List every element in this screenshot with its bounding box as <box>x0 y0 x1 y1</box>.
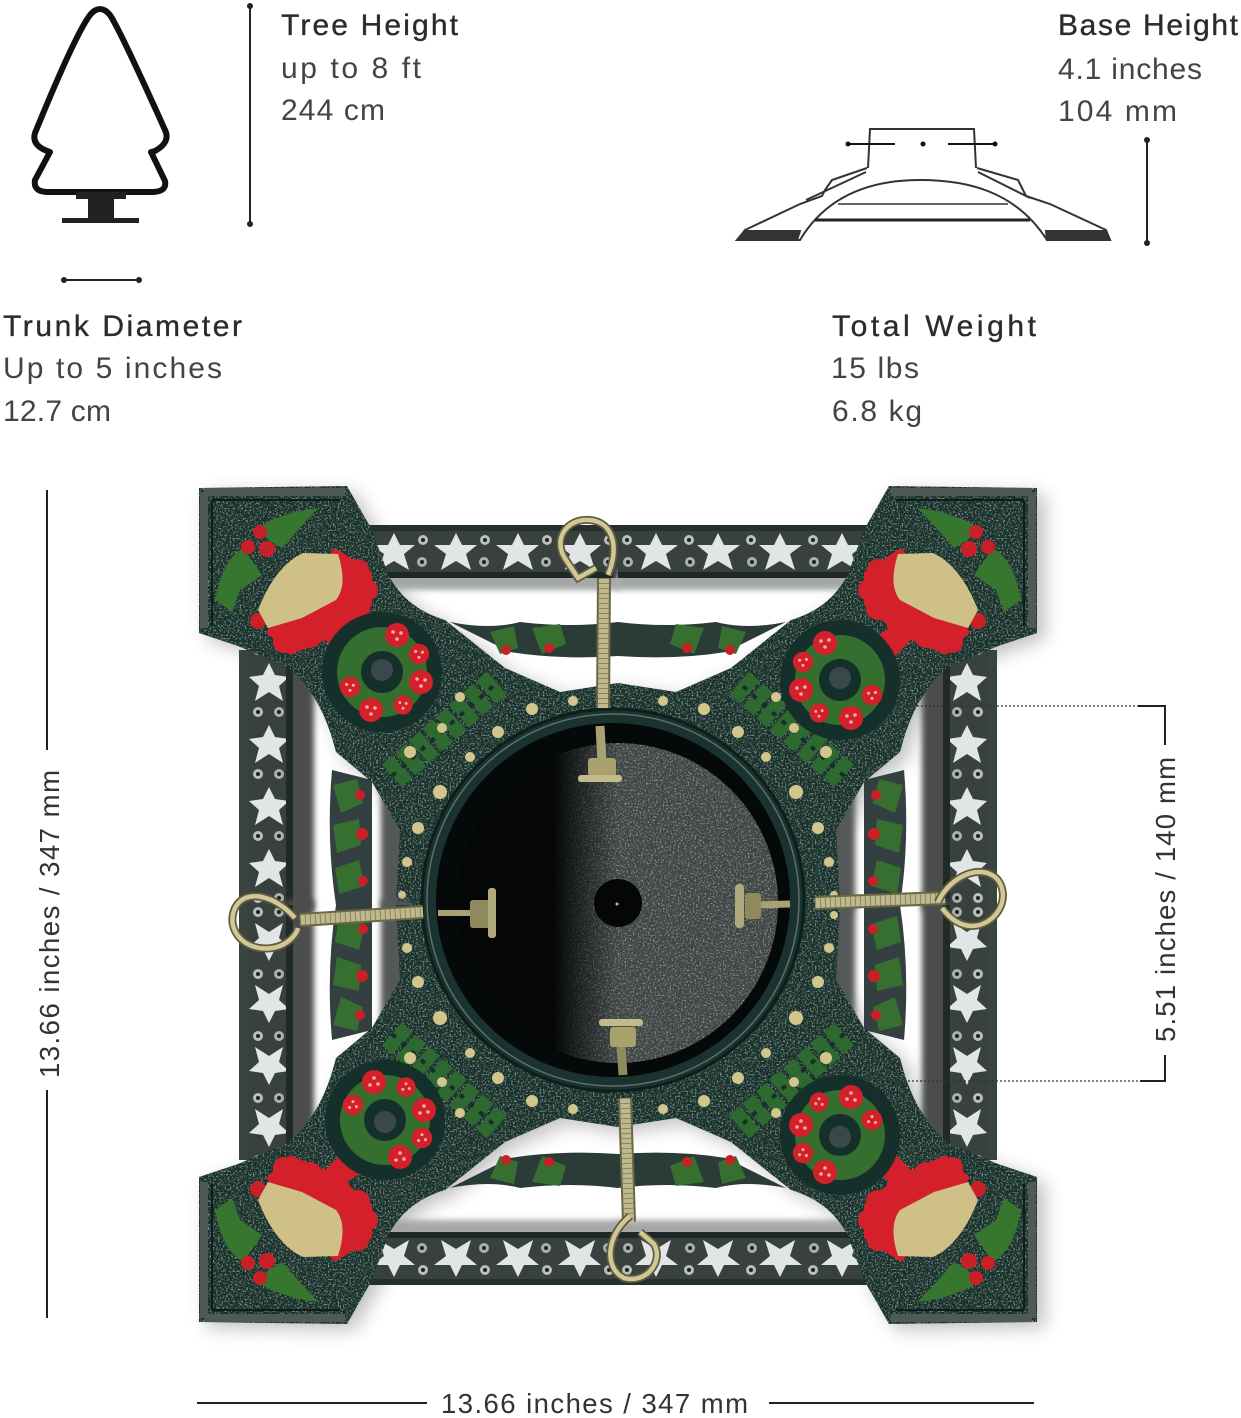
tree height text: up to 8 ft <box>281 52 422 85</box>
wreath: top right <box>780 620 900 740</box>
height dimension left: 13.66 inches / 347 mm <box>34 770 65 1078</box>
stand corner: bottom right <box>616 900 1037 1324</box>
trunk diameter measure line <box>61 277 142 283</box>
cast iron tree stand <box>199 486 1037 1324</box>
total weight text <box>831 310 1037 428</box>
tree height text: 244 cm <box>281 94 385 127</box>
base height measure line <box>1144 137 1150 246</box>
tree height text: Tree Height <box>281 9 459 42</box>
stand corner: bottom left <box>199 900 620 1324</box>
tree height measure line <box>247 3 253 227</box>
eye bolt: bottom <box>599 1019 657 1279</box>
base height text: 104 mm <box>1058 95 1177 128</box>
tree icon <box>34 9 167 223</box>
trunk diameter text: Up to 5 inches <box>3 352 222 385</box>
trunk diameter text: Trunk Diameter <box>3 310 242 343</box>
soft shadow <box>207 492 1045 1330</box>
wreath: top left <box>322 612 442 732</box>
ring diameter dimension right: 5.51 inches / 140 mm <box>1150 757 1181 1042</box>
trunk diameter text <box>3 310 242 428</box>
ring diameter dimension right <box>880 706 1181 1081</box>
total weight text: Total Weight <box>832 310 1037 343</box>
total weight text: 15 lbs <box>831 352 919 385</box>
eye bolt: top <box>560 520 622 782</box>
base height text <box>1058 9 1239 128</box>
tree height text <box>281 9 459 127</box>
eye bolt: left <box>232 888 496 948</box>
base height text: Base Height <box>1058 9 1239 42</box>
eye bolt: right <box>735 872 1003 928</box>
base height text: 4.1 inches <box>1058 53 1202 86</box>
centre post <box>594 879 642 927</box>
wreath: bottom right <box>780 1075 900 1195</box>
total weight text: 6.8 kg <box>832 395 922 428</box>
trunk diameter text: 12.7 cm <box>3 395 111 428</box>
wreath: bottom left <box>325 1060 445 1180</box>
central ring <box>422 709 804 1091</box>
base profile icon <box>737 129 1110 240</box>
stand corner: top right <box>616 486 1037 910</box>
stand corner: top left <box>199 486 620 910</box>
